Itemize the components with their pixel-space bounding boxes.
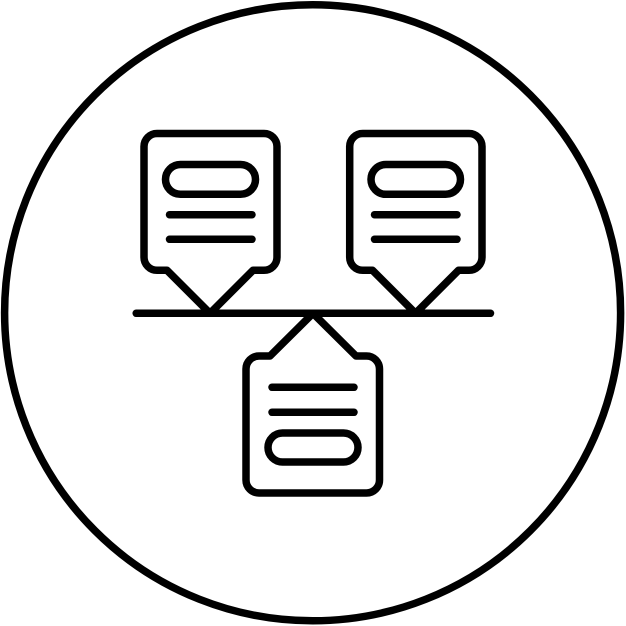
text line one xyxy=(272,384,354,391)
pill xyxy=(166,164,256,194)
callout outline xyxy=(246,313,380,493)
callout outline xyxy=(350,134,482,313)
text line two xyxy=(272,409,354,416)
callout: top right xyxy=(350,134,482,313)
timeline axis xyxy=(136,310,490,317)
pill xyxy=(371,164,460,194)
callout: bottom xyxy=(246,313,380,493)
callout outline xyxy=(144,134,277,313)
text line one xyxy=(170,211,252,218)
text line one xyxy=(374,211,457,218)
callout: top left xyxy=(144,134,277,313)
pill xyxy=(268,433,358,462)
text line two xyxy=(170,236,252,243)
text line two xyxy=(374,236,457,243)
